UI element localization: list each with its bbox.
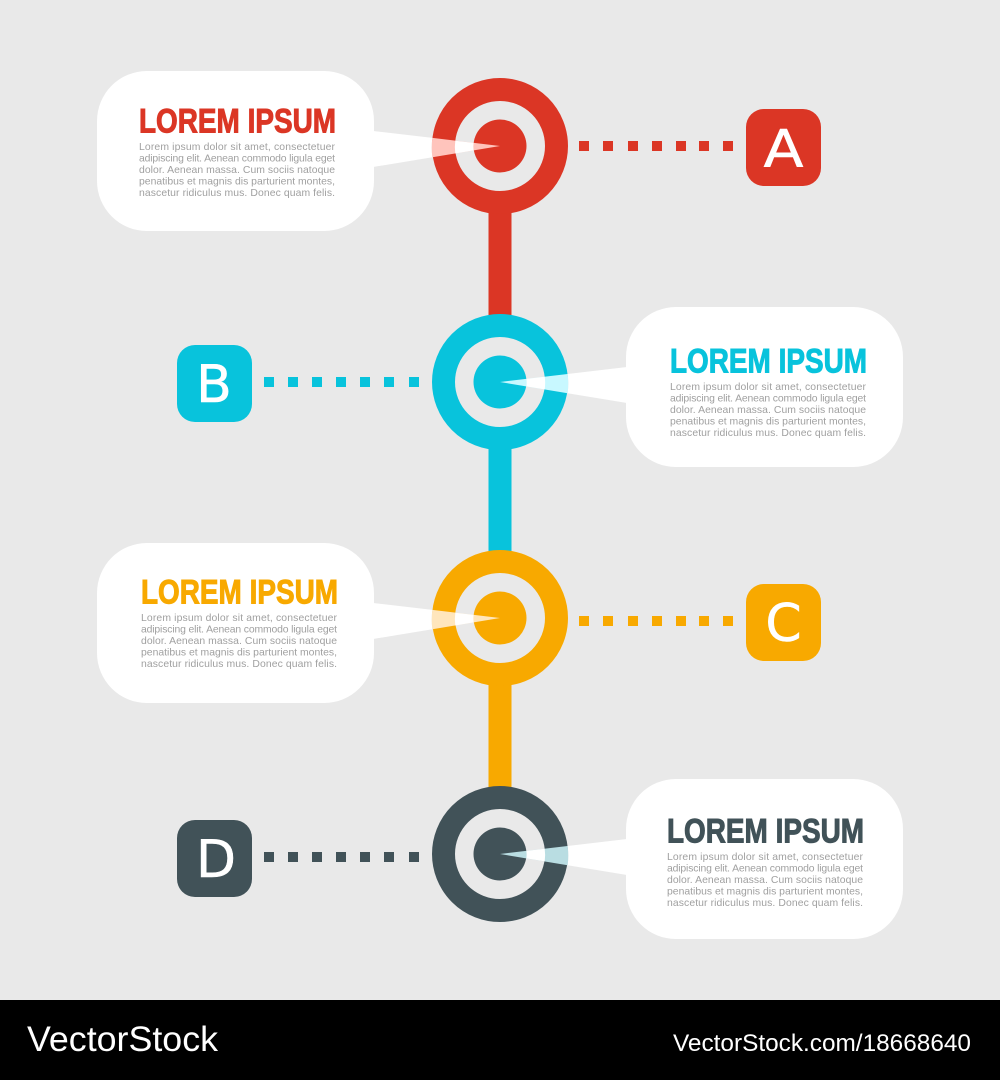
body text A: penatibus et magnis dis parturient montes,: [139, 176, 335, 188]
target node C: [444, 562, 556, 674]
heading D: LOREM IPSUM: [667, 813, 864, 851]
callout pointer A: [373, 131, 500, 167]
callout panel C: [97, 543, 374, 703]
body text B: [670, 382, 867, 439]
step C: [97, 543, 821, 703]
dotted line B: [264, 377, 419, 387]
step D: [177, 779, 903, 939]
letter badge A: A: [764, 120, 804, 180]
callout panel D: [626, 779, 903, 939]
heading A: LOREM IPSUM: [139, 103, 336, 141]
body text D: Lorem ipsum dolor sit amet, consectetuer: [667, 852, 864, 863]
target node B: [444, 326, 556, 438]
footer brand: VectorStock: [27, 1020, 219, 1059]
body text A: nascetur ridiculus mus. Donec quam felis.: [139, 188, 335, 199]
connector: cyan: [488, 436, 512, 556]
dotted line C: [579, 616, 733, 626]
heading B: LOREM IPSUM: [670, 343, 867, 381]
step A: [97, 71, 821, 231]
body text C: dolor. Aenean massa. Cum sociis natoque: [141, 636, 337, 647]
letter badge D: [177, 820, 252, 897]
footer image id: VectorStock.com/18668640: [673, 1030, 971, 1057]
body text D: dolor. Aenean massa. Cum sociis natoque: [667, 875, 863, 886]
body text C: adipiscing elit. Aenean commodo ligula eget: [141, 624, 337, 636]
letter badge C: C: [765, 594, 802, 654]
dotted line A: [579, 141, 733, 151]
callout pointer D: [500, 839, 627, 875]
letter badge B: B: [196, 355, 232, 415]
callout panel B: [626, 307, 903, 467]
body text D: [667, 852, 864, 909]
letter badge A: [746, 109, 821, 186]
body text B: nascetur ridiculus mus. Donec quam felis.: [670, 428, 866, 439]
body text B: Lorem ipsum dolor sit amet, consectetuer: [670, 382, 867, 393]
footer bar: [0, 1000, 1000, 1080]
callout pointer C: [373, 603, 500, 639]
body text D: penatibus et magnis dis parturient montes,: [667, 886, 863, 898]
body text C: Lorem ipsum dolor sit amet, consectetuer: [141, 613, 338, 624]
letter badge D: D: [196, 830, 236, 890]
callout panel A: [97, 71, 374, 231]
body text D: nascetur ridiculus mus. Donec quam felis.: [667, 898, 863, 909]
body text D: adipiscing elit. Aenean commodo ligula eget: [667, 864, 863, 874]
target node D: [444, 798, 556, 910]
callout pointer B: [500, 367, 627, 403]
body text C: nascetur ridiculus mus. Donec quam felis.: [141, 659, 337, 670]
connector: red: [488, 200, 512, 320]
target node A: [444, 90, 556, 202]
connector: orange: [488, 672, 512, 792]
body text B: penatibus et magnis dis parturient montes,: [670, 416, 866, 428]
body text C: [141, 613, 338, 670]
step B: [177, 307, 903, 467]
letter badge C: [746, 584, 821, 661]
body text A: [139, 142, 336, 199]
body text A: Lorem ipsum dolor sit amet, consectetuer: [139, 142, 336, 153]
body text C: penatibus et magnis dis parturient montes,: [141, 648, 337, 658]
letter badge B: [177, 345, 252, 422]
body text B: adipiscing elit. Aenean commodo ligula eget: [670, 394, 866, 404]
heading C: LOREM IPSUM: [141, 574, 338, 612]
dotted line D: [264, 852, 419, 862]
body text A: dolor. Aenean massa. Cum sociis natoque: [139, 165, 335, 176]
body text A: adipiscing elit. Aenean commodo ligula eget: [139, 154, 335, 164]
body text B: dolor. Aenean massa. Cum sociis natoque: [670, 405, 866, 416]
